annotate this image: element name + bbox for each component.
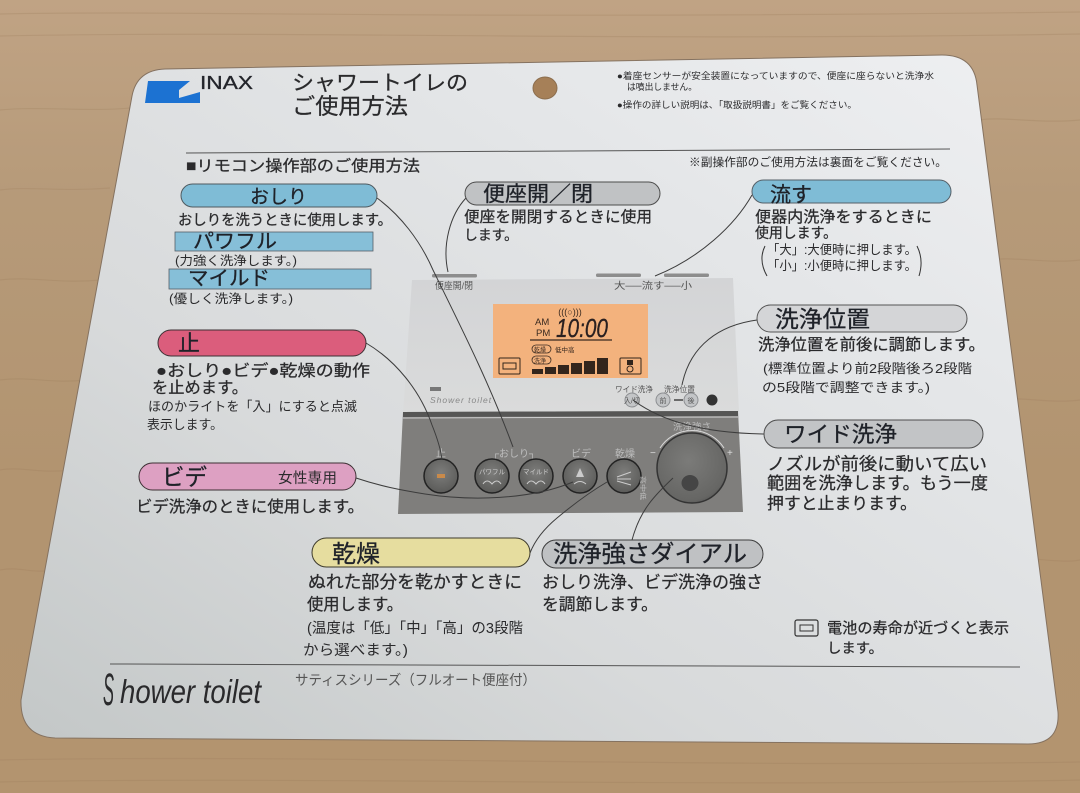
- punched hole: [533, 77, 557, 99]
- LCD display: [493, 304, 648, 378]
- series name: サティスシリーズ（フルオート便座付）: [295, 672, 536, 688]
- logo: INAX: INAX: [200, 73, 253, 93]
- small logo on remote: Shower toilet: [430, 395, 492, 405]
- wide and position controls: 前: [660, 396, 666, 405]
- panel: stop: 止: [178, 331, 200, 356]
- button labels: ┌おしり┐: [492, 448, 536, 460]
- panel: oshiri: おしり: [250, 187, 307, 208]
- wide and position controls: 洗浄位置: [664, 384, 695, 394]
- mild: [169, 268, 371, 306]
- panel: stop: ●おしり●ビデ●乾燥の動作: [156, 361, 370, 380]
- LCD display: 低中高: [555, 345, 575, 354]
- mild: (優しく洗浄します。): [169, 292, 293, 306]
- logo: INAX: [145, 73, 253, 103]
- panel: flush: [752, 180, 951, 276]
- button labels: +: [727, 448, 733, 459]
- bottom rule: [110, 664, 1020, 667]
- panel: dry: 乾燥: [332, 541, 380, 568]
- panel: dry: から選べます。): [303, 642, 408, 659]
- battery note: [795, 620, 1009, 656]
- panel: bidet: ビデ洗浄のときに使用します。: [136, 497, 364, 516]
- panel: wide wash: ワイド洗浄: [784, 422, 897, 447]
- panel: wide wash: ノズルが前後に動いて広い: [767, 454, 987, 474]
- top notes: は噴出しません。: [627, 81, 697, 92]
- brand script: [103, 665, 263, 716]
- panel: toilet seat: 便座開／閉: [483, 183, 593, 206]
- panel: wash position: 洗浄位置: [775, 306, 870, 332]
- power: (力強く洗浄します。): [175, 254, 297, 268]
- LCD display: (((○))): [558, 307, 582, 317]
- LCD display: 乾燥: [534, 346, 546, 354]
- panel: flush: 使用します。: [755, 225, 837, 242]
- button bars: [432, 274, 709, 278]
- panel: oshiri: [169, 184, 392, 306]
- button labels: 洗浄強さ: [673, 421, 711, 433]
- panel: bidet: 女性専用: [278, 470, 337, 487]
- brand script: S: [103, 665, 114, 716]
- panel: flush: 流す: [770, 184, 812, 207]
- power: [175, 231, 373, 268]
- button labels: ビデ: [571, 447, 591, 460]
- panel: stop: を止めます。: [152, 379, 248, 397]
- panel: wash position: (標準位置より前2段階後ろ2段階: [763, 361, 972, 376]
- panel: toilet seat: [464, 182, 660, 243]
- LCD display: PM: [536, 328, 550, 339]
- mild: マイルド: [188, 268, 270, 290]
- panel: intensity dial: おしり洗浄、ビデ洗浄の強さ: [542, 572, 763, 592]
- panel: intensity dial: を調節します。: [542, 595, 658, 614]
- button labels: −: [650, 448, 656, 459]
- battery note: します。: [827, 640, 883, 656]
- panel: wide wash: [764, 420, 988, 513]
- buttons: マイルド: [523, 468, 549, 476]
- title: [292, 72, 468, 119]
- dial: [657, 430, 727, 503]
- wide and position controls: 入/切: [624, 397, 640, 405]
- panel: flush: 「小」:小便時に押します。: [767, 259, 917, 273]
- small logo on remote: [430, 387, 492, 405]
- LCD display: 10:00: [556, 313, 608, 343]
- button labels: 止: [436, 448, 446, 460]
- buttons: パワフル: [479, 468, 506, 476]
- remote control diagram: 便座開/閉: [435, 280, 473, 292]
- panel: flush: 便器内洗浄をするときに: [755, 208, 932, 226]
- panel: oshiri: おしりを洗うときに使用します。: [178, 212, 392, 229]
- top notes: ●操作の詳しい説明は、「取扱説明書」をご覧ください。: [617, 99, 857, 110]
- button labels: 乾燥: [615, 447, 635, 460]
- buttons: [424, 459, 648, 501]
- panel: intensity dial: 洗浄強さダイアル: [553, 541, 747, 568]
- panel: wide wash: 範囲を洗浄します。もう一度: [767, 474, 988, 493]
- section heading: ■リモコン操作部のご使用方法: [186, 157, 420, 175]
- panel: stop: 表示します。: [147, 417, 223, 432]
- top notes: ●着座センサーが安全装置になっていますので、便座に座らないと洗浄水: [617, 70, 934, 81]
- panel: dry: (温度は「低」「中」「高」の3段階: [307, 620, 523, 637]
- panel: intensity dial: [542, 540, 763, 614]
- battery note: 電池の寿命が近づくと表示: [827, 620, 1009, 637]
- panel: wash position: [757, 305, 985, 395]
- panel: toilet seat: 便座を開閉するときに使用: [464, 208, 652, 226]
- title: シャワートイレの: [292, 72, 468, 95]
- buttons: 高中低: [639, 476, 648, 501]
- brand script: hower toilet: [120, 673, 263, 710]
- wide and position controls: [615, 384, 718, 407]
- remote control diagram: [398, 274, 743, 514]
- LCD display: 洗浄: [534, 357, 546, 365]
- panel: wash position: の5段階で調整できます。): [762, 380, 930, 395]
- panel: stop: [147, 330, 370, 432]
- panel: flush: 「大」:大便時に押します。: [767, 243, 917, 257]
- wide and position controls: 後: [688, 396, 694, 405]
- panel: wide wash: 押すと止まります。: [767, 494, 917, 513]
- panel: dry: 使用します。: [307, 595, 403, 614]
- panel: bidet: ビデ: [162, 464, 207, 490]
- power: パワフル: [193, 231, 277, 253]
- leader lines: [356, 195, 764, 553]
- remote upper panel: [403, 278, 739, 414]
- panel: stop: ほのかライトを「入」にすると点滅: [148, 399, 357, 414]
- sub-panel note: ※副操作部のご使用方法は裏面をご覧ください。: [689, 155, 947, 169]
- remote lower panel: [398, 411, 743, 514]
- panel: bidet: [136, 463, 364, 516]
- panel: dry: ぬれた部分を乾かすときに: [308, 572, 522, 592]
- remote control diagram: 大──流す──小: [614, 280, 693, 292]
- panel: dry: [303, 538, 530, 659]
- panel: wash position: 洗浄位置を前後に調節します。: [758, 336, 985, 354]
- top notes: [617, 70, 934, 110]
- title: ご使用方法: [292, 94, 408, 119]
- wide and position controls: ワイド洗浄: [615, 384, 653, 394]
- button labels: [436, 421, 733, 460]
- LCD display: AM: [535, 317, 549, 328]
- panel: toilet seat: します。: [464, 227, 518, 243]
- divider: [186, 149, 950, 153]
